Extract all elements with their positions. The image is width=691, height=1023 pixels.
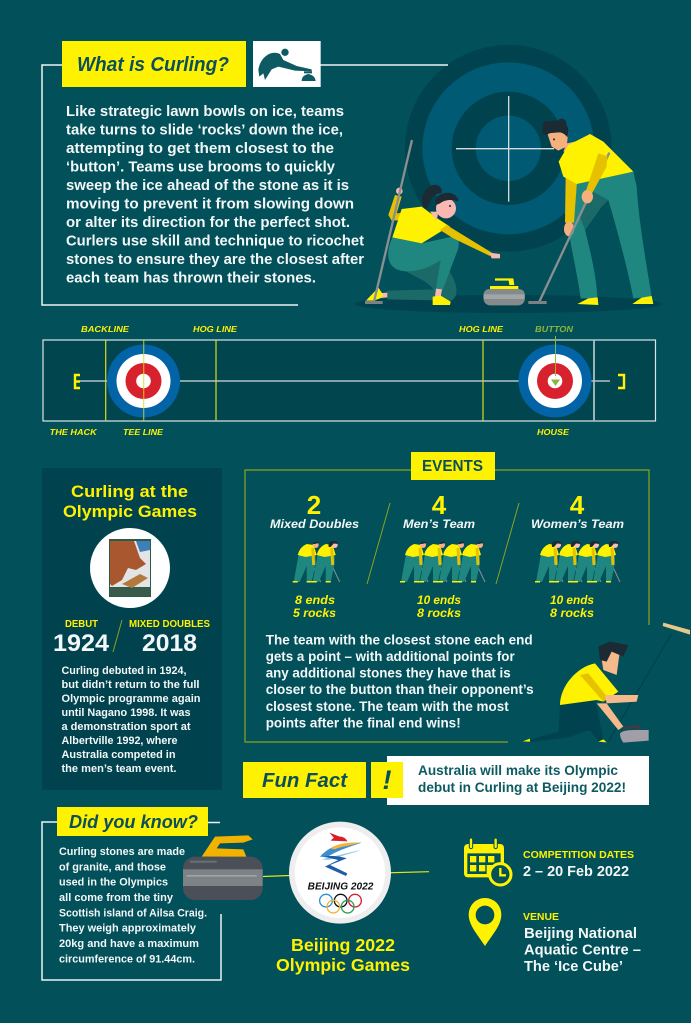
text: competition dates: COMPETITION DATES <box>523 849 634 861</box>
text: stone facts: They weigh approximately <box>59 923 197 935</box>
event: women's team <box>531 490 624 620</box>
event: men's team: Men’s Team <box>403 517 475 531</box>
panel: did you know <box>42 807 221 980</box>
event: women's team: 10 ends <box>550 595 594 607</box>
text: stone facts: used in the Olympics <box>59 877 168 889</box>
exclamation badge <box>371 762 403 798</box>
text: olympic history: but didn’t return to the full <box>62 679 200 691</box>
text: scoring: closer to the button than their opponent’s <box>266 681 534 697</box>
text: curling description: take turns to slide ‘rocks’ down the ice, <box>66 122 343 139</box>
text: stone facts: Curling stones are made <box>59 846 185 858</box>
stat: mixed doubles: MIXED DOUBLES <box>129 619 210 630</box>
text: olympic history: Albertville 1992, where <box>62 735 178 747</box>
event: men's team: 10 ends <box>417 595 461 607</box>
text: olympic history: the men’s team event. <box>62 763 176 775</box>
text: olympic history: Curling debuted in 1924, <box>62 665 186 677</box>
text: venue: Aquatic Centre – <box>524 942 641 958</box>
male curler <box>528 119 653 305</box>
text: olympic history: Olympic programme again <box>62 693 201 705</box>
text: curling description <box>66 103 364 286</box>
icon: curler pictogram <box>253 41 321 87</box>
heading: olympic games <box>63 482 197 521</box>
event: women's team: 8 rocks <box>550 608 594 620</box>
event: women's team: 4 <box>570 490 585 520</box>
text: olympic history <box>62 665 201 775</box>
beijing emblem swooshes <box>320 833 362 876</box>
fun fact text: debut in Curling at Beijing 2022! <box>418 780 626 795</box>
text: stone facts <box>59 846 207 965</box>
stat: debut: 1924 <box>53 630 110 657</box>
heading: did you know <box>57 807 208 836</box>
event: mixed doubles: Mixed Doubles <box>270 517 359 531</box>
icon: left hack <box>75 375 80 388</box>
text: scoring <box>266 631 534 730</box>
icon: 1924 poster <box>90 528 170 608</box>
text: scoring: any additional stones they have that is <box>266 665 511 681</box>
text: olympic history: a demonstration sport at <box>62 721 191 733</box>
panel: events <box>245 452 649 742</box>
event: men's team: 4 <box>432 490 447 520</box>
heading: beijing 2022 olympic games: Beijing 2022 <box>291 935 395 955</box>
event: men's team <box>400 490 485 620</box>
curling stone <box>483 278 525 305</box>
event: mixed doubles <box>270 490 359 620</box>
sheet labels: HOUSE <box>537 428 570 437</box>
text: venue: Beijing National <box>524 926 637 942</box>
sheet labels <box>50 325 573 437</box>
button arrow <box>551 336 560 386</box>
text: curling description: attempting to get them closest to the <box>66 140 334 157</box>
stat: mixed doubles <box>129 619 210 657</box>
text: olympic history: until Nagano 1998. It was <box>62 707 190 719</box>
exclamation badge: ! <box>382 765 392 795</box>
stat: debut: DEBUT <box>65 619 98 630</box>
text: curling description: moving to prevent it from slowing down <box>66 196 354 212</box>
text: venue: The ‘Ice Cube’ <box>524 959 623 975</box>
sheet labels: TEE LINE <box>123 428 164 437</box>
icon: calendar <box>464 838 511 885</box>
text: stone facts: Scottish island of Ailsa Craig. <box>59 907 207 919</box>
text: competition dates: 2 – 20 Feb 2022 <box>523 864 629 880</box>
text: stone facts: all come from the tiny <box>59 892 174 904</box>
text: scoring: The team with the closest stone each end <box>266 631 533 647</box>
illustration: curler with broom <box>523 623 690 743</box>
left house <box>107 340 180 421</box>
target rings <box>405 45 612 252</box>
icon: location pin <box>469 898 501 946</box>
heading: beijing 2022 olympic games <box>276 935 410 975</box>
callout: fun fact <box>243 756 649 805</box>
heading: what is curling <box>62 41 246 87</box>
text: stone facts: 20kg and have a maximum <box>59 938 199 950</box>
text: curling description: Curlers use skill and technique to ricochet <box>66 232 364 250</box>
heading: did you know: Did you know? <box>69 812 198 832</box>
text: scoring: closest stone. The team with the most <box>266 698 509 714</box>
text: venue <box>523 911 641 975</box>
panel: what is curling <box>42 41 448 305</box>
sheet labels: THE HACK <box>50 428 98 437</box>
text: venue: VENUE <box>523 911 559 923</box>
icon: beijing 2022 emblem <box>289 822 391 924</box>
event: men's team: 8 rocks <box>417 608 461 620</box>
event: mixed doubles: 2 <box>307 490 321 520</box>
event: mixed doubles: 8 ends <box>295 595 335 607</box>
icon: right hack <box>618 375 624 388</box>
text: curling description: sweep the ice ahead of the stone as it is <box>66 177 349 194</box>
text: stone facts: circumference of 91.44cm. <box>59 953 195 965</box>
fun fact text <box>418 763 626 795</box>
panel: curling at the olympic games <box>42 468 222 790</box>
sheet labels: HOG LINE <box>193 325 238 334</box>
icon: beijing 2022 emblem: BEIJING 2022 <box>308 881 374 892</box>
text: curling description: each team has thrown their stones. <box>66 270 316 286</box>
heading: olympic games: Curling at the <box>71 482 188 501</box>
heading: beijing 2022 olympic games: Olympic Games <box>276 955 410 975</box>
female curler <box>365 140 500 305</box>
diagram: curling sheet <box>43 325 656 437</box>
fun fact label <box>243 762 366 798</box>
right house <box>518 344 592 418</box>
olympic rings <box>320 894 361 913</box>
text: curling description: ‘button’. Teams use brooms to quickly <box>66 158 336 176</box>
illustration: target rings and curlers <box>355 45 662 313</box>
text: scoring: gets a point – with additional points for <box>266 648 515 664</box>
connector line <box>263 872 429 876</box>
event: mixed doubles: 5 rocks <box>293 608 336 620</box>
heading: olympic games: Olympic Games <box>63 502 197 521</box>
text: competition dates <box>523 849 634 880</box>
text: stone facts: of granite, and those <box>59 861 166 873</box>
text: curling description: stones to ensure they are the closest after <box>66 251 364 268</box>
fun fact text: Australia will make its Olympic <box>418 763 618 778</box>
text: scoring: points after the final end wins! <box>266 714 461 730</box>
text: olympic history: Australia competed in <box>62 749 176 761</box>
text: curling description: Like strategic lawn bowls on ice, teams <box>66 103 344 120</box>
text: curling description: or alter its direction for the perfect shot. <box>66 214 350 231</box>
heading: what is curling: What is Curling? <box>77 54 229 76</box>
sheet labels: BUTTON <box>535 325 573 334</box>
heading: events <box>411 452 495 480</box>
stat: debut <box>53 619 110 657</box>
heading: events: EVENTS <box>422 458 483 475</box>
stat: mixed doubles: 2018 <box>142 630 197 657</box>
event: women's team: Women’s Team <box>531 517 624 531</box>
ground shadow <box>355 295 662 313</box>
fun fact label: Fun Fact <box>262 770 348 792</box>
icon: granite curling stone <box>183 835 263 900</box>
sheet labels: HOG LINE <box>459 325 504 334</box>
sheet labels: BACKLINE <box>81 325 130 334</box>
